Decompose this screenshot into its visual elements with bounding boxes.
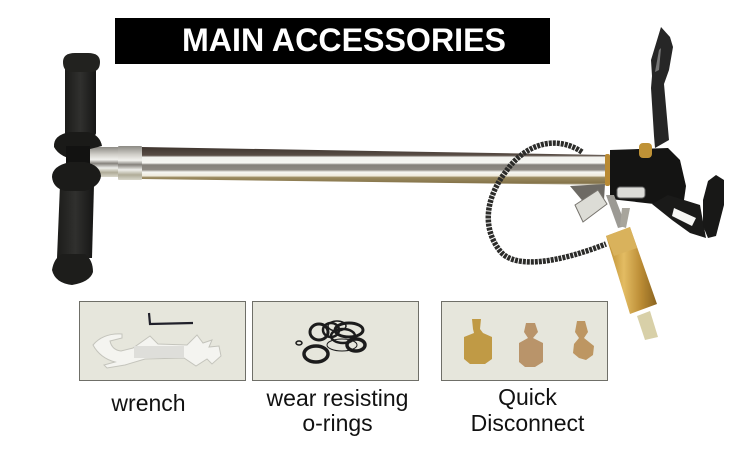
label: o-rings: o-rings xyxy=(302,410,373,436)
pump head xyxy=(488,27,724,340)
icon: rubber rings xyxy=(296,321,365,362)
brass ring xyxy=(605,154,610,186)
label: quick disconnect: Disconnect xyxy=(471,410,585,436)
title banner xyxy=(115,18,550,64)
filter tip xyxy=(637,311,658,340)
side slot xyxy=(617,187,645,198)
panel: wrench xyxy=(80,302,246,380)
icon: fitting one xyxy=(464,319,492,364)
foot pad xyxy=(703,175,724,238)
upper grip xyxy=(54,53,102,160)
black block xyxy=(610,148,686,206)
foot lever xyxy=(651,27,673,148)
label: quick disconnect: Quick xyxy=(498,384,557,410)
pump handle xyxy=(52,53,102,285)
icon: wrench xyxy=(93,334,221,368)
brass knob xyxy=(639,143,652,158)
valve stems xyxy=(606,195,626,228)
panel: quick disconnect xyxy=(442,302,608,380)
handle centre xyxy=(66,146,90,170)
icon: hex key xyxy=(149,313,193,324)
label: wrench: wrench xyxy=(110,390,186,416)
brass filter xyxy=(606,227,657,314)
hose xyxy=(488,143,606,262)
title banner: MAIN ACCESSORIES xyxy=(182,22,506,58)
panel: o-rings xyxy=(252,302,418,380)
label: quick disconnect xyxy=(471,384,585,436)
label: o-rings: wear resisting xyxy=(266,385,408,411)
gauge port xyxy=(570,184,605,205)
label: o-rings xyxy=(266,385,408,436)
lower grip xyxy=(52,162,101,285)
icon: fitting two xyxy=(519,323,543,367)
pump barrel xyxy=(88,146,608,185)
foot bracket xyxy=(652,195,706,238)
icon: fitting three xyxy=(573,321,594,360)
